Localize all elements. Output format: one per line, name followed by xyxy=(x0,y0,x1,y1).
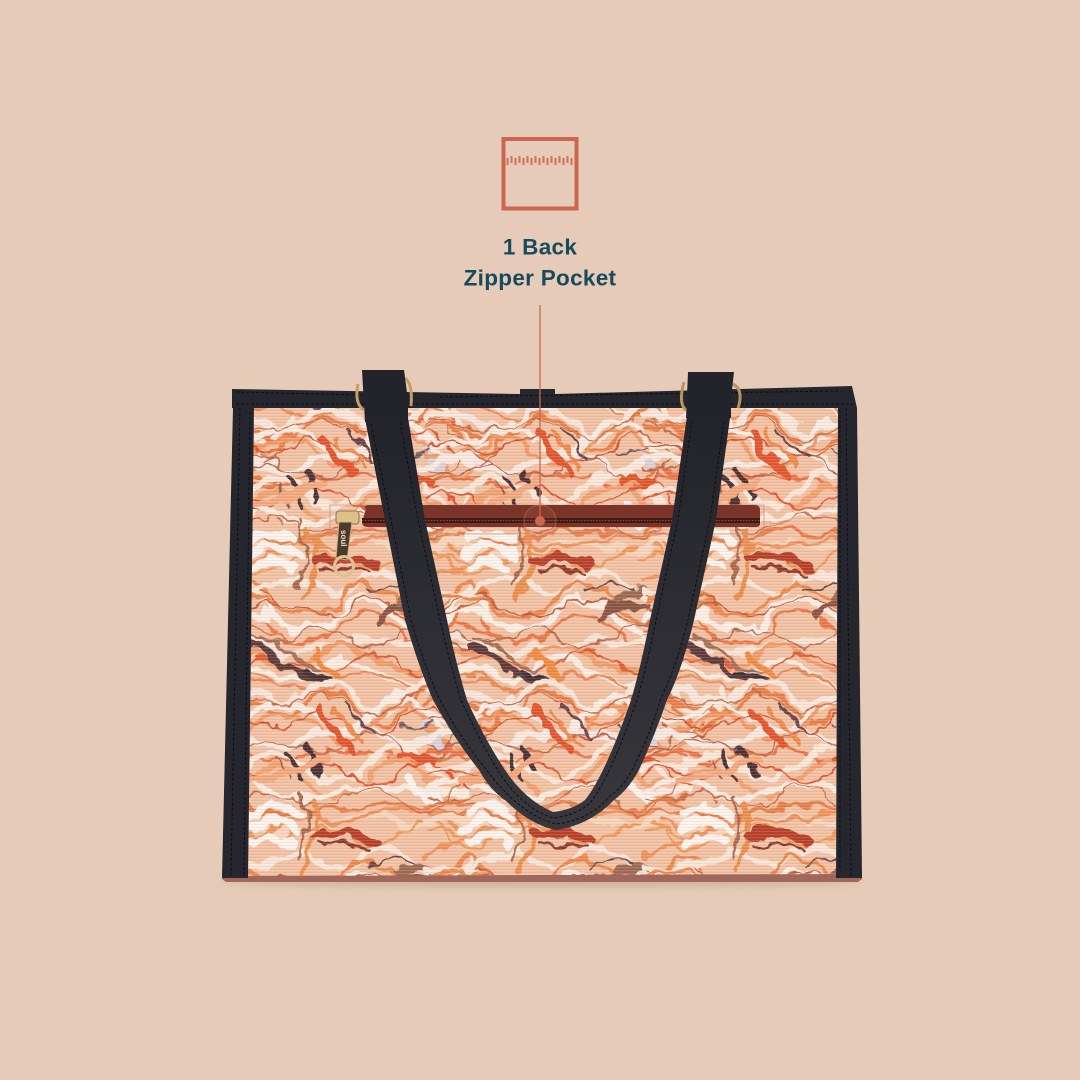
icon: back zipper pocket xyxy=(504,139,576,208)
bag base xyxy=(222,870,862,882)
zipper pull: soul xyxy=(339,530,348,546)
title: 1 Back Zipper Pocket: 1 Back xyxy=(503,234,577,260)
right trim xyxy=(836,408,862,878)
title: 1 Back Zipper Pocket: Zipper Pocket xyxy=(464,266,617,290)
callout line and marker xyxy=(524,305,556,537)
trim stitching xyxy=(231,408,851,876)
zipper pull xyxy=(334,511,359,576)
ground shadow xyxy=(220,878,864,886)
zipper xyxy=(330,505,764,534)
left trim xyxy=(222,408,254,878)
right strap tab and buckle xyxy=(681,372,740,418)
left strap tab and buckle xyxy=(357,370,411,422)
handbag xyxy=(222,370,862,889)
shoulder strap xyxy=(365,412,730,830)
top band xyxy=(232,386,857,408)
title: 1 Back Zipper Pocket xyxy=(464,234,617,290)
fabric panel xyxy=(248,408,838,876)
